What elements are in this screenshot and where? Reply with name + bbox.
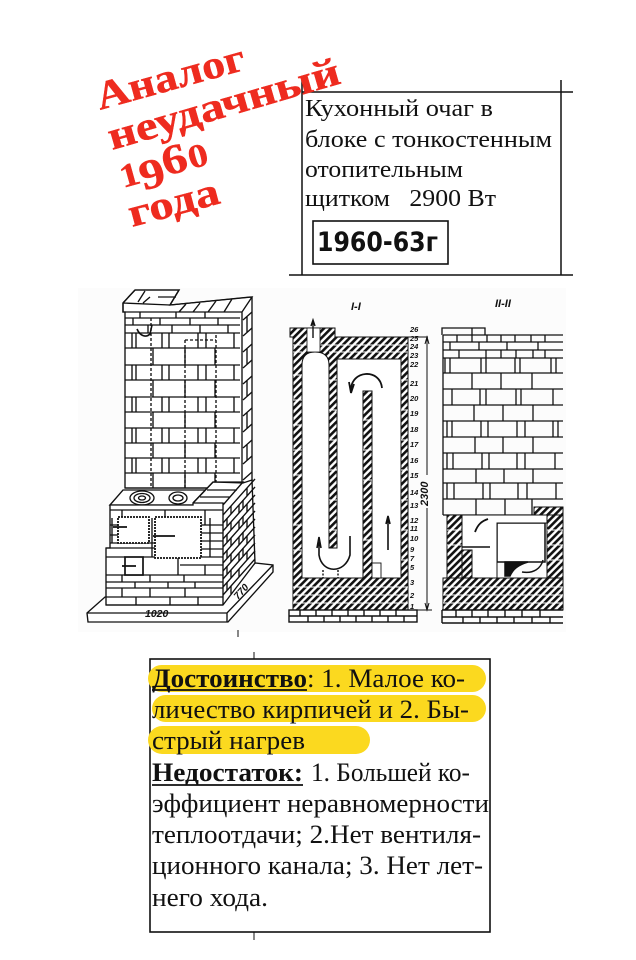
- plinth with dimensions: 1020: [145, 608, 169, 620]
- course numbers and 2300 dimension: 20: [409, 394, 419, 403]
- disadvantages text: теплоотдачи; 2.Нет вентиля-: [152, 820, 481, 849]
- title block text: отопительным: [305, 156, 463, 183]
- course numbers and 2300 dimension: 1: [410, 602, 414, 611]
- hatched masonry walls: [290, 328, 408, 610]
- foundation: [289, 610, 417, 622]
- red stamp heading: failed analog of 1960: неудачный: [102, 48, 345, 159]
- red stamp heading: failed analog of 1960: 1: [115, 155, 144, 195]
- drawing: perspective view of the stove: [87, 290, 273, 622]
- drawing: section II-II: [442, 298, 563, 623]
- course numbers and 2300 dimension: 13: [410, 501, 419, 510]
- stove doors: [113, 517, 201, 575]
- course numbers and 2300 dimension: 9: [410, 545, 415, 554]
- course numbers and 2300 dimension: 16: [410, 456, 419, 465]
- disadvantages text: ционного канала; 3. Нет лет-: [152, 851, 483, 880]
- title block text: щитком 2900 Вт: [305, 185, 496, 212]
- yellow highlights: [148, 665, 486, 754]
- title block frame: [289, 80, 573, 275]
- advantages text: [152, 664, 469, 755]
- hatched lower masonry: [443, 507, 563, 610]
- advantages text: личество кирпичей и 2. Бы-: [152, 695, 469, 724]
- disadvantages text: эффициент неравномерности: [152, 789, 489, 818]
- cooktop with two burners: [110, 490, 213, 505]
- course numbers and 2300 dimension: 19: [410, 409, 419, 418]
- course numbers and 2300 dimension: 14: [410, 488, 419, 497]
- mortar joints: [293, 345, 408, 603]
- red stamp heading: failed analog of 1960: 6: [156, 135, 193, 186]
- advantages text: стрый нагрев: [152, 726, 305, 755]
- course numbers and 2300 dimension: 11: [410, 524, 418, 533]
- course numbers and 2300 dimension: 5: [410, 563, 415, 572]
- course numbers and 2300 dimension: 15: [410, 471, 419, 480]
- advantages text: : 1. Малое ко-: [307, 664, 465, 693]
- course numbers and 2300 dimension: 25: [409, 334, 419, 343]
- course numbers and 2300 dimension: 22: [409, 360, 419, 369]
- firebox opening: [462, 511, 547, 578]
- course numbers and 2300 dimension: 2: [409, 591, 415, 600]
- title block text: Кухонный очаг в: [305, 95, 493, 122]
- center tick above bottom panel: [237, 630, 239, 637]
- course numbers and 2300 dimension: 26: [409, 325, 419, 334]
- course numbers and 2300 dimension: 17: [410, 440, 419, 449]
- red stamp heading: failed analog of 1960: Аналог: [90, 34, 250, 119]
- foundation: [442, 610, 563, 623]
- panel: advantages and disadvantages: [148, 652, 490, 940]
- course numbers and 2300 dimension: [408, 325, 432, 611]
- disadvantages text: Недостаток:: [152, 758, 303, 787]
- disadvantages text: [152, 758, 489, 912]
- red stamp heading: failed analog of 1960: 0: [183, 136, 212, 176]
- course numbers and 2300 dimension: 12: [410, 516, 419, 525]
- plinth with dimensions: 770: [232, 582, 252, 602]
- date badge: 1960-63г: [317, 227, 438, 258]
- course numbers and 2300 dimension: 18: [410, 425, 419, 434]
- course numbers and 2300 dimension: 23: [409, 351, 419, 360]
- stove body masonry: [106, 479, 255, 605]
- tower masonry: [123, 290, 252, 488]
- course numbers and 2300 dimension: 3: [410, 578, 415, 587]
- course numbers and 2300 dimension: 10: [410, 534, 419, 543]
- disadvantages text: 1. Большей ко-: [311, 758, 470, 787]
- title block text: блоке с тонкостенным: [305, 126, 552, 153]
- advantages text: Достоинство: [152, 664, 307, 693]
- course numbers and 2300 dimension: 2300: [419, 481, 431, 507]
- title block text: [305, 95, 552, 212]
- section label II-II: II-II: [495, 298, 512, 310]
- date badge: [313, 221, 448, 264]
- plinth with dimensions: [87, 563, 273, 622]
- red stamp heading: failed analog of 1960: 9: [134, 149, 171, 200]
- course numbers and 2300 dimension: 7: [410, 554, 415, 563]
- red stamp heading: failed analog of 1960: года: [123, 168, 224, 236]
- flue and arrows: [307, 320, 390, 578]
- upper brick courses: [442, 328, 563, 515]
- drawing: section I-I: [289, 301, 432, 622]
- disadvantages text: него хода.: [152, 883, 268, 912]
- section label I-I: I-I: [351, 301, 362, 313]
- panel frame: [150, 659, 490, 932]
- course numbers and 2300 dimension: 24: [409, 342, 419, 351]
- red stamp heading: failed analog of 1960: [90, 34, 345, 236]
- course numbers and 2300 dimension: 21: [409, 379, 418, 388]
